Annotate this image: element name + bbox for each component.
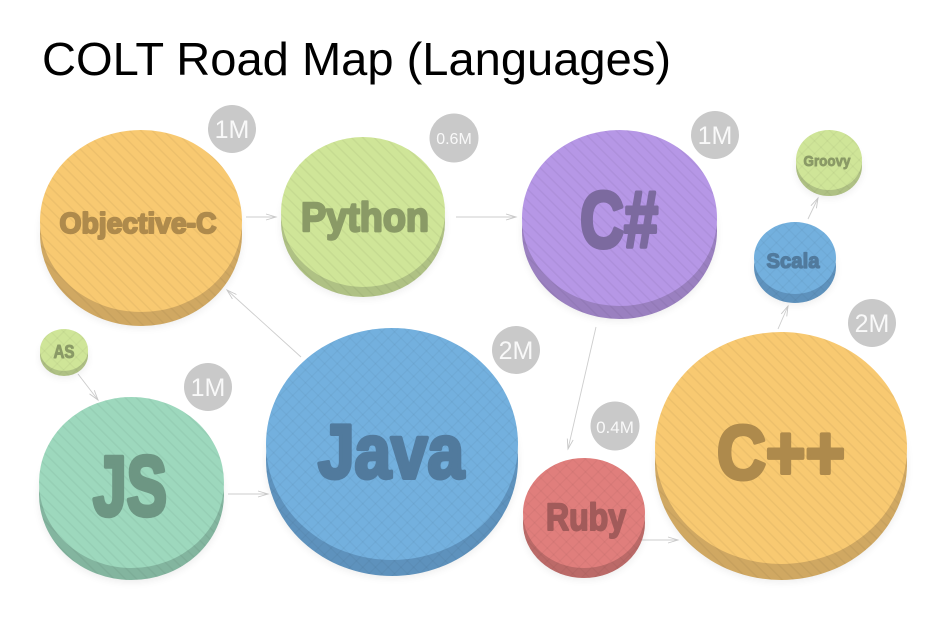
arrow: C++ to Scala (778, 306, 788, 329)
badge: JS 1M (184, 363, 232, 411)
coin: C#: C# (580, 175, 658, 264)
coin: C++: C++ (717, 411, 845, 496)
coin: Ruby (523, 458, 645, 580)
badge: Java 2M (492, 326, 540, 374)
badge: JS 1M: 1M (191, 374, 225, 402)
arrows (78, 198, 818, 540)
coin: AS: AS (54, 342, 74, 362)
coin: Scala (754, 222, 836, 305)
arrow: Java to Objective-C (227, 290, 301, 357)
arrow: Ruby to C++ (642, 539, 678, 541)
coin: C++ (655, 332, 907, 582)
coin: Objective-C (40, 130, 242, 328)
arrow: Python to C# (456, 216, 516, 218)
coin: Groovy (796, 130, 862, 198)
badge: C++ 2M: 2M (855, 310, 889, 338)
arrow: Scala to Groovy (808, 198, 818, 219)
arrow: C# to Ruby (568, 327, 596, 449)
badge: C# 1M: 1M (698, 122, 732, 150)
coin: C# (522, 130, 717, 321)
badge: Python 0.6M (430, 114, 478, 162)
coin: Ruby: Ruby (546, 497, 626, 539)
badge: Java 2M: 2M (499, 337, 533, 365)
coin: Scala: Scala (766, 250, 820, 273)
coin: AS (40, 329, 88, 378)
badge: C# 1M (691, 111, 739, 159)
badge: Objective-C 1M: 1M (215, 116, 249, 144)
coin: Python: Python (301, 194, 429, 240)
coin: JS: JS (93, 439, 167, 533)
coin: JS (39, 397, 224, 582)
coin: Java (266, 328, 518, 578)
arrow: Objective-C to Python (246, 216, 276, 218)
badge: C++ 2M (848, 299, 896, 347)
title: COLT Road Map (Languages) (42, 33, 671, 85)
badge: Ruby 0.4M: 0.4M (596, 418, 634, 437)
arrow: AS to JS (78, 374, 98, 400)
arrow: JS to Java (228, 493, 268, 495)
coin: Objective-C: Objective-C (60, 208, 217, 240)
coin: Groovy: Groovy (804, 153, 851, 170)
badge: Objective-C 1M (208, 105, 256, 153)
badge: Python 0.6M: 0.6M (436, 131, 472, 148)
coin: Java: Java (318, 410, 465, 495)
coin: Python (281, 137, 445, 299)
badge: Ruby 0.4M (590, 402, 640, 450)
